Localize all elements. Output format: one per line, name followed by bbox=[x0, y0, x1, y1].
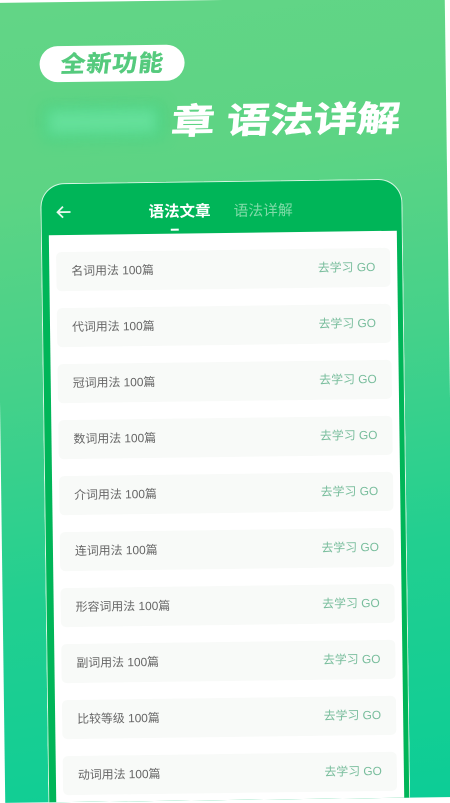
list row: comparatives: 比较等级 100篇 bbox=[77, 710, 160, 725]
list row: articles: 冠词用法 100篇 bbox=[73, 374, 155, 389]
list row: conjunctions: 去学习 GO bbox=[321, 539, 379, 554]
list row: adjectives: 去学习 GO bbox=[322, 595, 380, 610]
active tab indicator bbox=[171, 229, 179, 231]
list row: adverbs: 副词用法 100篇 bbox=[76, 654, 159, 669]
blurred heading area bbox=[44, 107, 165, 136]
list row: pronouns bbox=[57, 303, 391, 347]
list row: adjectives bbox=[60, 583, 395, 627]
list row: comparatives bbox=[62, 695, 396, 739]
list row: prepositions bbox=[59, 471, 393, 515]
icon: back arrow bbox=[56, 206, 71, 218]
list row: adjectives: 形容词用法 100篇 bbox=[76, 598, 170, 613]
list row: pronouns: 代词用法 100篇 bbox=[72, 318, 155, 333]
list row: numerals bbox=[58, 415, 393, 459]
heading: 章 语法详解 bbox=[170, 100, 402, 142]
list row: comparatives: 去学习 GO bbox=[324, 707, 381, 722]
list row: adverbs bbox=[61, 639, 396, 683]
list row: numerals: 去学习 GO bbox=[320, 428, 378, 442]
list row: conjunctions: 连词用法 100篇 bbox=[75, 542, 158, 557]
list row: verbs bbox=[63, 751, 397, 795]
badge text: 全新功能 bbox=[59, 50, 166, 77]
list row: numerals: 数词用法 100篇 bbox=[73, 430, 156, 445]
list row: articles bbox=[58, 359, 392, 403]
list row: pronouns: 去学习 GO bbox=[318, 316, 376, 330]
active tab: 语法文章 bbox=[148, 203, 211, 221]
list row: nouns: 名词用法 100篇 bbox=[71, 262, 154, 278]
list row: articles: 去学习 GO bbox=[319, 372, 377, 386]
list row: verbs: 去学习 GO bbox=[324, 763, 382, 778]
list row: prepositions: 去学习 GO bbox=[321, 484, 378, 498]
list row: nouns bbox=[56, 247, 391, 291]
inactive tab: 语法详解 bbox=[233, 203, 293, 220]
list row: conjunctions bbox=[60, 527, 394, 571]
panel: phone screen bbox=[40, 179, 411, 803]
list row: verbs: 动词用法 100篇 bbox=[78, 766, 161, 781]
list row: prepositions: 介词用法 100篇 bbox=[74, 486, 157, 501]
list row: adverbs: 去学习 GO bbox=[323, 651, 380, 666]
panel: article list bbox=[49, 230, 405, 803]
badge: new feature bbox=[39, 45, 185, 82]
list row: nouns: 去学习 GO bbox=[318, 260, 375, 274]
